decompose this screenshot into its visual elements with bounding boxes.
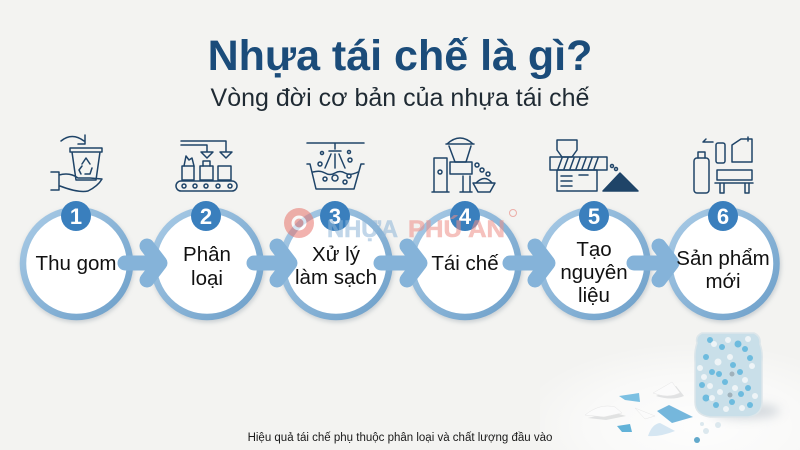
label 5: liệu	[578, 284, 610, 307]
label 3: làm sạch	[295, 266, 377, 289]
label 2: Phân	[183, 243, 231, 266]
arrow 3 to 4	[381, 246, 420, 280]
icon: extruder and pellets	[550, 140, 638, 191]
label 4: Tái chế	[431, 252, 499, 275]
label 3: Xử lý	[312, 243, 361, 266]
icon: sorting conveyor	[176, 141, 237, 191]
icon: shredder	[432, 138, 495, 192]
badge 1	[61, 201, 91, 231]
label 1: Thu gom	[36, 252, 116, 275]
step 2 circle	[151, 208, 265, 322]
title: Nhựa tái chế là gì?	[208, 32, 592, 80]
badge 4	[450, 201, 480, 231]
step 1 circle	[20, 208, 134, 322]
watermark: PHÚ AN	[408, 215, 505, 243]
plastic flakes	[585, 382, 721, 443]
step 4 circle	[409, 208, 523, 322]
badge 2: 2	[200, 204, 212, 229]
label 5: nguyên	[560, 261, 628, 284]
step 5 circle	[538, 208, 652, 322]
subtitle: Vòng đời cơ bản của nhựa tái chế	[211, 84, 590, 112]
badge 2	[191, 201, 221, 231]
label 5: Tạo	[576, 238, 612, 261]
arrow 4 to 5	[510, 246, 548, 280]
watermark: NHỰA	[327, 216, 398, 243]
badge 5: 5	[588, 204, 600, 229]
jar of plastic pellets	[695, 333, 780, 419]
footnote: Hiệu quả tái chế phụ thuộc phân loại và chất lượng đầu vào	[248, 432, 552, 444]
watermark	[284, 208, 516, 243]
icon: washing basin	[307, 143, 364, 189]
badge 5	[579, 201, 609, 231]
arrow 1 to 2	[125, 246, 160, 280]
arrow 2 to 3	[254, 246, 290, 280]
badge 3: 3	[329, 204, 341, 229]
icon: hand and recycling bin	[51, 135, 102, 191]
step 6 circle	[667, 208, 781, 322]
badge 6: 6	[717, 204, 729, 229]
step 3 circle	[280, 208, 394, 322]
badge 4: 4	[459, 204, 472, 229]
label 6: mới	[705, 270, 741, 293]
badge 1: 1	[70, 204, 82, 229]
arrow 5 to 6	[634, 246, 672, 280]
label 2: loại	[191, 267, 223, 290]
badge 3	[320, 201, 350, 231]
badge 6	[708, 201, 738, 231]
label 6: Sản phẩm	[676, 247, 770, 270]
icon: new products	[694, 137, 753, 193]
